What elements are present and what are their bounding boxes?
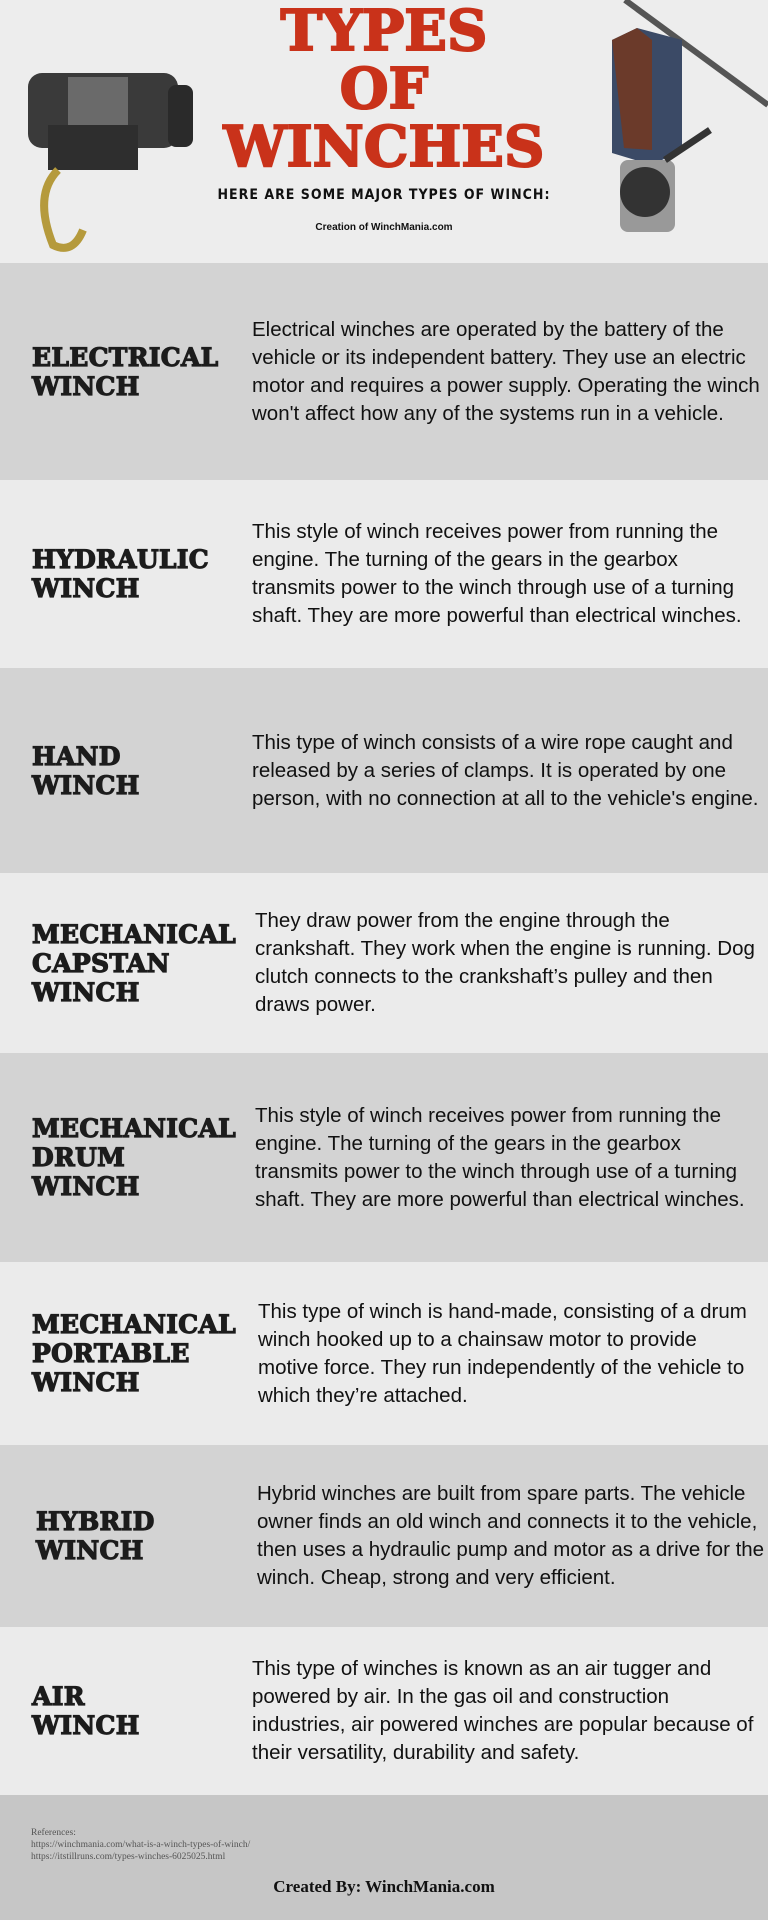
heading: WINCH — [32, 770, 140, 800]
heading: MECHANICAL — [32, 920, 236, 948]
text: Electrical winches are operated by the battery of the vehicle or its independent battery. They use an electric motor and requires a power supply. Operating the winch won't affect how any of the systems run in a vehicle. — [252, 318, 760, 424]
panel: hybrid winch — [0, 1445, 768, 1627]
heading: CAPSTAN — [32, 948, 170, 978]
heading: WINCH — [32, 1368, 140, 1397]
references: https://winchmania.com/what-is-a-winch-types-of-winch/ — [31, 1840, 250, 1850]
heading: PORTABLE — [32, 1339, 190, 1368]
text: Hybrid winches are built from spare parts. The vehicle owner finds an old winch and connects it to the vehicle, then uses a hydraulic pump and motor as a drive for the winch. Cheap, strong and very efficient. — [257, 1482, 764, 1589]
title: WINCHES — [224, 114, 544, 180]
heading — [31, 1310, 236, 1397]
icon: electric winch — [28, 73, 193, 252]
heading — [35, 1507, 155, 1565]
footer — [0, 1795, 768, 1920]
panel: hand winch — [0, 668, 768, 873]
heading: HAND — [32, 742, 121, 770]
heading — [31, 1682, 140, 1740]
header — [0, 0, 768, 263]
heading: MECHANICAL — [32, 1114, 236, 1143]
references: References: — [31, 1828, 76, 1838]
references: https://itstillruns.com/types-winches-6025025.html — [31, 1852, 225, 1862]
heading: WINCH — [36, 1536, 144, 1565]
heading: WINCH — [32, 978, 140, 1006]
heading — [31, 545, 209, 603]
references — [31, 1828, 250, 1862]
icon: hoist and hand winch — [612, 0, 768, 232]
panel: air winch — [0, 1627, 768, 1795]
title — [222, 0, 544, 180]
credit: Creation of WinchMania.com — [315, 222, 453, 233]
text: This type of winch is hand-made, consisting of a drum winch hooked up to a chainsaw motor to provide motive force. They run independently of the vehicle to which they’re attached. — [258, 1300, 747, 1406]
heading: ELECTRICAL — [32, 342, 219, 372]
heading — [31, 1114, 236, 1201]
title: OF — [340, 56, 428, 122]
heading: WINCH — [32, 372, 140, 400]
heading: HYBRID — [36, 1507, 155, 1536]
panel: mechanical portable winch — [0, 1262, 768, 1445]
heading — [31, 742, 140, 800]
heading: MECHANICAL — [32, 1310, 236, 1339]
heading: WINCH — [32, 1711, 140, 1740]
panel: hydraulic winch — [0, 480, 768, 668]
subtitle: HERE ARE SOME MAJOR TYPES OF WINCH: — [218, 187, 550, 203]
text: This style of winch receives power from running the engine. The turning of the gears in the gearbox transmits power to the winch through use of a turning shaft. They are more powerful than electrical winches. — [252, 520, 742, 627]
panel: mechanical drum winch — [0, 1053, 768, 1262]
heading — [31, 342, 219, 400]
panel: electrical winch — [0, 263, 768, 480]
heading: WINCH — [32, 574, 140, 603]
created by: Created By: WinchMania.com — [273, 1877, 495, 1896]
heading: DRUM — [32, 1143, 125, 1172]
heading: HYDRAULIC — [32, 545, 209, 574]
panel: mechanical capstan winch — [0, 873, 768, 1053]
heading: WINCH — [32, 1172, 140, 1201]
text: This type of winches is known as an air tugger and powered by air. In the gas oil and construction industries, air powered winches are popular because of their versatility, durability and safety. — [252, 1657, 753, 1764]
text: They draw power from the engine through the crankshaft. They work when the engine is running. Dog clutch connects to the crankshaft’s pulley and then draws power. — [255, 909, 755, 1016]
heading: AIR — [32, 1682, 85, 1711]
text: This style of winch receives power from running the engine. The turning of the gears in the gearbox transmits power to the winch through use of a turning shaft. They are more powerful than electrical winches. — [255, 1104, 745, 1210]
text: This type of winch consists of a wire rope caught and released by a series of clamps. It is operated by one person, with no connection at all to the vehicle's engine. — [252, 730, 758, 810]
heading — [31, 920, 236, 1006]
